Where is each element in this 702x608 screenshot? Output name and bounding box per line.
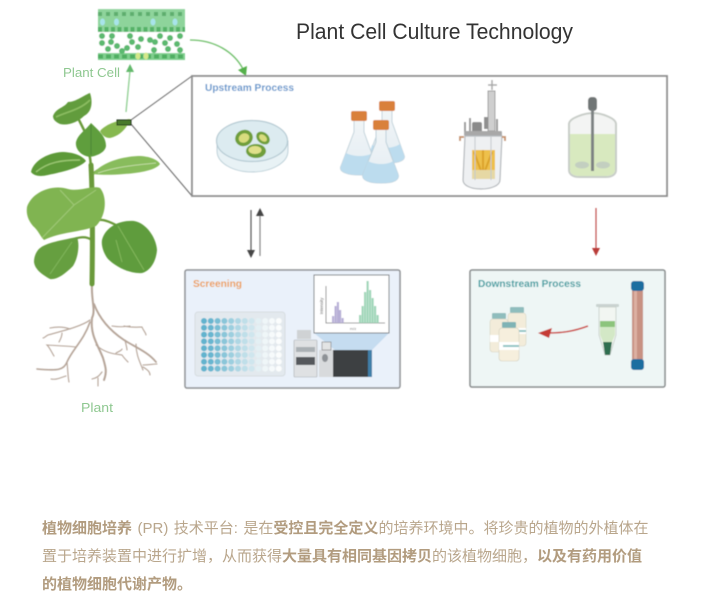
icon: vials — [490, 307, 526, 361]
arrow: purification — [538, 326, 588, 338]
text block: description — [42, 520, 648, 593]
text block: description: 的植物细胞代谢产物。 — [42, 576, 192, 593]
top leaf — [53, 93, 92, 125]
small right leaf — [100, 119, 130, 138]
lower left leaf — [34, 237, 78, 279]
left flask — [340, 120, 377, 175]
label: screening: Screening — [193, 279, 242, 290]
text block: description: 植物细胞培养 (PR) 技术平台: 是在受控且完全定义的培养环境中。将珍贵的植物的外植体在 — [42, 520, 648, 537]
chart: mass spectrum — [314, 275, 389, 333]
panel: downstream process — [470, 270, 665, 387]
centre leaf — [76, 123, 106, 157]
icon: centrifuge tube — [596, 304, 619, 355]
zoom lines — [131, 76, 192, 196]
chart: mass spectrum: m/z — [350, 326, 356, 331]
title: Plant Cell Culture Technology — [296, 19, 573, 44]
arrow: upstream to downstream — [592, 208, 600, 256]
arrow: plant to cell — [126, 64, 134, 112]
label: plant cell: Plant Cell — [63, 66, 120, 80]
arrows: upstream and screening — [247, 208, 264, 258]
label: plant: Plant — [81, 401, 114, 415]
icon: leaf cross-section — [98, 8, 185, 60]
roots — [37, 284, 157, 386]
arrow: cell to upstream — [190, 40, 247, 76]
icon: chromatography column — [631, 281, 644, 370]
text block: description: 置于培养装置中进行扩增，从而获得大量具有相同基因拷贝的该植物细胞，以及有药用价值 — [42, 548, 642, 565]
stem — [74, 120, 116, 284]
illustration: plant — [27, 93, 160, 386]
icon: flasks — [340, 101, 404, 183]
lower right leaf — [102, 221, 157, 273]
sampled region marker — [117, 120, 131, 125]
label: downstream: Downstream Process — [478, 279, 581, 290]
icon: petri dish — [216, 120, 288, 172]
left leaf — [31, 152, 86, 176]
icon: mass spectrometer — [294, 330, 389, 377]
big leaf — [27, 187, 105, 240]
icon: well plate — [195, 312, 285, 376]
right leaf — [93, 156, 160, 175]
panel: upstream process — [192, 76, 667, 196]
back flask — [369, 110, 404, 163]
panel: screening — [185, 270, 400, 388]
icon: bioreactor — [460, 80, 505, 189]
label: upstream: Upstream Process — [205, 83, 294, 94]
front flask — [363, 129, 398, 183]
icon: stirred tank — [569, 97, 616, 177]
chart: mass spectrum: Intensity — [319, 297, 324, 314]
